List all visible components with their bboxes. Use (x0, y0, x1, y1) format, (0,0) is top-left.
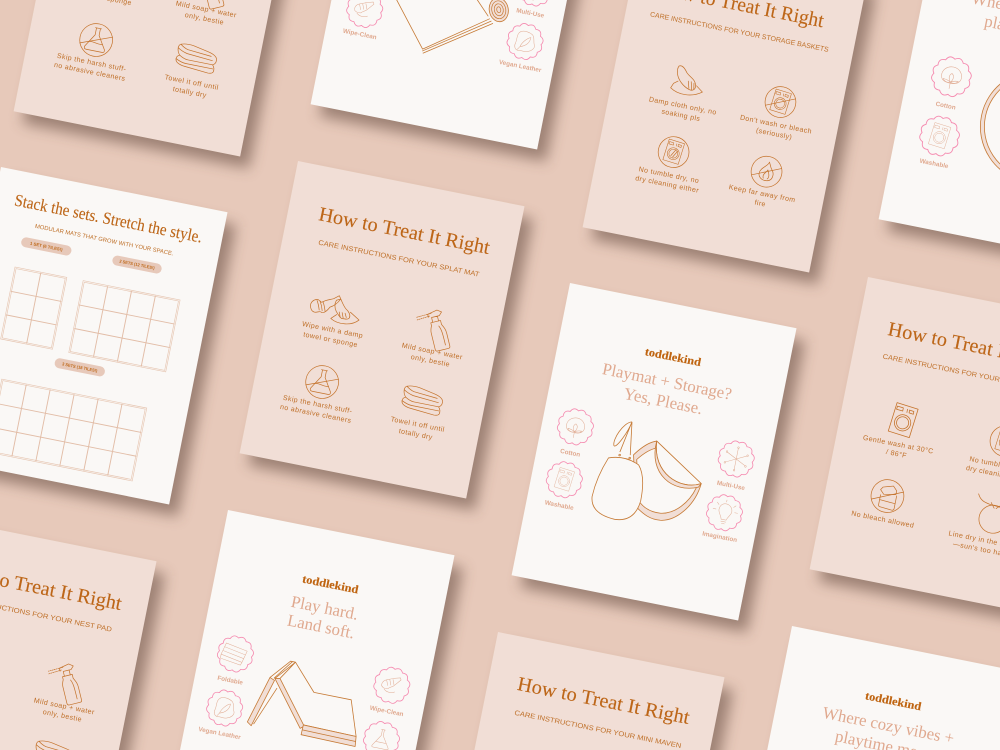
label: towel: Towel it off until (164, 74, 219, 92)
label: vegan leather: Vegan Leather (498, 59, 542, 74)
icon: folded towels (401, 385, 445, 416)
label: soap and water: only, bestie (42, 709, 82, 724)
badge: wipe clean (344, 0, 385, 30)
badge: washable (544, 459, 585, 500)
icon: folded towels (33, 740, 77, 750)
panel: mini maven care card (440, 632, 725, 750)
pill: one set (20, 237, 72, 256)
label: no wash: (seriously) (755, 127, 793, 141)
pill: three sets (54, 357, 106, 377)
panel: product card with rolled mat, top middle (311, 0, 596, 149)
badge: cotton (555, 406, 596, 448)
icon: no tumble dry (987, 423, 1000, 459)
label: no tumble dry: No tumble dry, no (638, 166, 700, 185)
label: foldable: Foldable (217, 675, 244, 687)
label: multi use: Multi-Use (516, 7, 545, 20)
icon: no bleach (868, 477, 907, 515)
label: soap and water: only, bestie (184, 12, 224, 27)
icon: crossed out flask (77, 21, 115, 59)
label: wipe clean: Wipe-Clean (342, 28, 377, 41)
label: wipe: Wipe with a damp (301, 321, 364, 340)
panel: cozy vibes card (734, 626, 1000, 750)
headline: Land soft. (286, 610, 356, 642)
headline: Where cozy vibes + (821, 703, 956, 748)
illustration: round mat (970, 61, 1000, 193)
headline: Playmat + Storage? (601, 359, 733, 404)
badge: multi use (716, 438, 757, 480)
icon: spray bottle (43, 659, 89, 708)
panel: splat mat care card (240, 161, 525, 498)
icon: hands wiping (308, 291, 363, 327)
badge: foldable (215, 633, 256, 675)
label: no tumble dry: dry cleaning either (635, 175, 700, 195)
subtitle: CARE INSTRUCTIONS FOR YOUR SPLAT MAT (318, 240, 481, 279)
panel: care card, right (810, 277, 1000, 614)
pill: two sets: 2 SETS (12 TILES!) (119, 259, 156, 271)
label: harsh cleaners: Skip the harsh stuff- (56, 53, 127, 73)
label: soap and water: only, bestie (410, 354, 450, 369)
label: multi use: Multi-Use (716, 480, 746, 492)
icon: no fire (748, 154, 785, 190)
pill: three sets: 3 SETS (18 TILES!) (62, 361, 98, 373)
panel: product card, top right (879, 0, 1000, 264)
badge: imagination (704, 492, 745, 533)
label: harsh cleaners: no abrasive cleaners (53, 62, 126, 83)
badge: multi use (515, 0, 556, 9)
label: towel: totally dry (172, 86, 207, 100)
panel: playmat and storage card (512, 283, 797, 620)
icon: crossed out flask (303, 363, 341, 401)
badge: vegan leather (504, 21, 546, 62)
pill: two sets (112, 255, 163, 274)
label: soap and water: Mild soap + water (175, 1, 237, 20)
label: vegan leather: Vegan Leather (198, 726, 242, 741)
label: gentle wash: Gentle wash at 30°C (862, 434, 934, 456)
icon: no washing (762, 84, 799, 120)
badge: vegan leather (204, 687, 245, 729)
label: wipe: towel or sponge (303, 331, 358, 349)
label: towel: Towel it off until (390, 416, 445, 434)
panel: modular mats card (0, 167, 228, 504)
label: keep from fire: fire (754, 200, 766, 209)
pill: one set: 1 SET (6 TILES!) (30, 241, 64, 252)
label: keep from fire: Keep far away from (728, 184, 796, 204)
label: harsh cleaners: no abrasive cleaners (279, 404, 352, 425)
label: harsh cleaners: Skip the harsh stuff- (282, 395, 353, 415)
illustration: folded mat (247, 655, 369, 746)
label: no bleach: No bleach allowed (851, 510, 915, 530)
label: towel: totally dry (398, 428, 433, 442)
badge: flask (361, 719, 402, 750)
icon: washing machine (888, 402, 919, 438)
label: washable: Washable (919, 158, 949, 170)
icon: damp cloth (670, 65, 707, 98)
label: no wash: Don't wash or bleach (739, 115, 812, 136)
icon: towel (175, 43, 219, 74)
illustration: rolled mat (354, 0, 521, 69)
title: Stack the sets. Stretch the style. (13, 191, 204, 247)
subtitle: CARE INSTRUCTIONS FOR YOUR STORAGE BASKETS (649, 11, 830, 54)
panel: foldable mat card (170, 510, 455, 750)
logo: toddlekind (644, 346, 703, 369)
label: washable: Washable (544, 499, 575, 512)
label: gentle wash: / 86°F (885, 448, 908, 460)
icon: line dry (972, 494, 1000, 536)
headline: Play hard. (289, 592, 360, 624)
icon: spray bottle (185, 0, 231, 12)
headline: Yes, Please. (622, 384, 704, 418)
label: damp cloth: soaking pls (661, 109, 701, 123)
panel: nest pad care card (0, 516, 157, 750)
grid: eighteen tiles (0, 380, 146, 480)
label: imagination: Imagination (702, 530, 738, 544)
logo: toddlekind (301, 574, 360, 597)
label: damp cloth: Damp cloth only, no (648, 96, 717, 117)
panel: care card for storage baskets (583, 0, 868, 272)
label: soap and water: Mild soap + water (401, 343, 463, 362)
title: How to Treat It Right (516, 673, 692, 729)
badge: wipe clean (371, 665, 413, 706)
badge: cotton (929, 54, 974, 100)
badge: washable (917, 113, 962, 159)
icon: no tumble dry (655, 134, 692, 170)
grid: twelve tiles (70, 281, 179, 371)
logo: toddlekind (864, 690, 923, 713)
label: cotton: Cotton (559, 448, 581, 459)
subtitle: CARE INSTRUCTIONS FOR YOUR MINI MAVEN (514, 710, 682, 750)
title: How to Treat It Right (317, 203, 492, 259)
grid: six tiles (1, 268, 66, 348)
icon: spray bottle (411, 305, 457, 354)
illustration: bag and mat (589, 417, 710, 535)
subtitle: MODULAR MATS THAT GROW WITH YOUR SPACE. (34, 224, 174, 257)
label: soap and water: Mild soap + water (33, 698, 95, 717)
panel: care card, top left (14, 0, 299, 156)
label: cotton: Cotton (935, 101, 956, 112)
label: wipe clean: Wipe-Clean (369, 705, 404, 718)
